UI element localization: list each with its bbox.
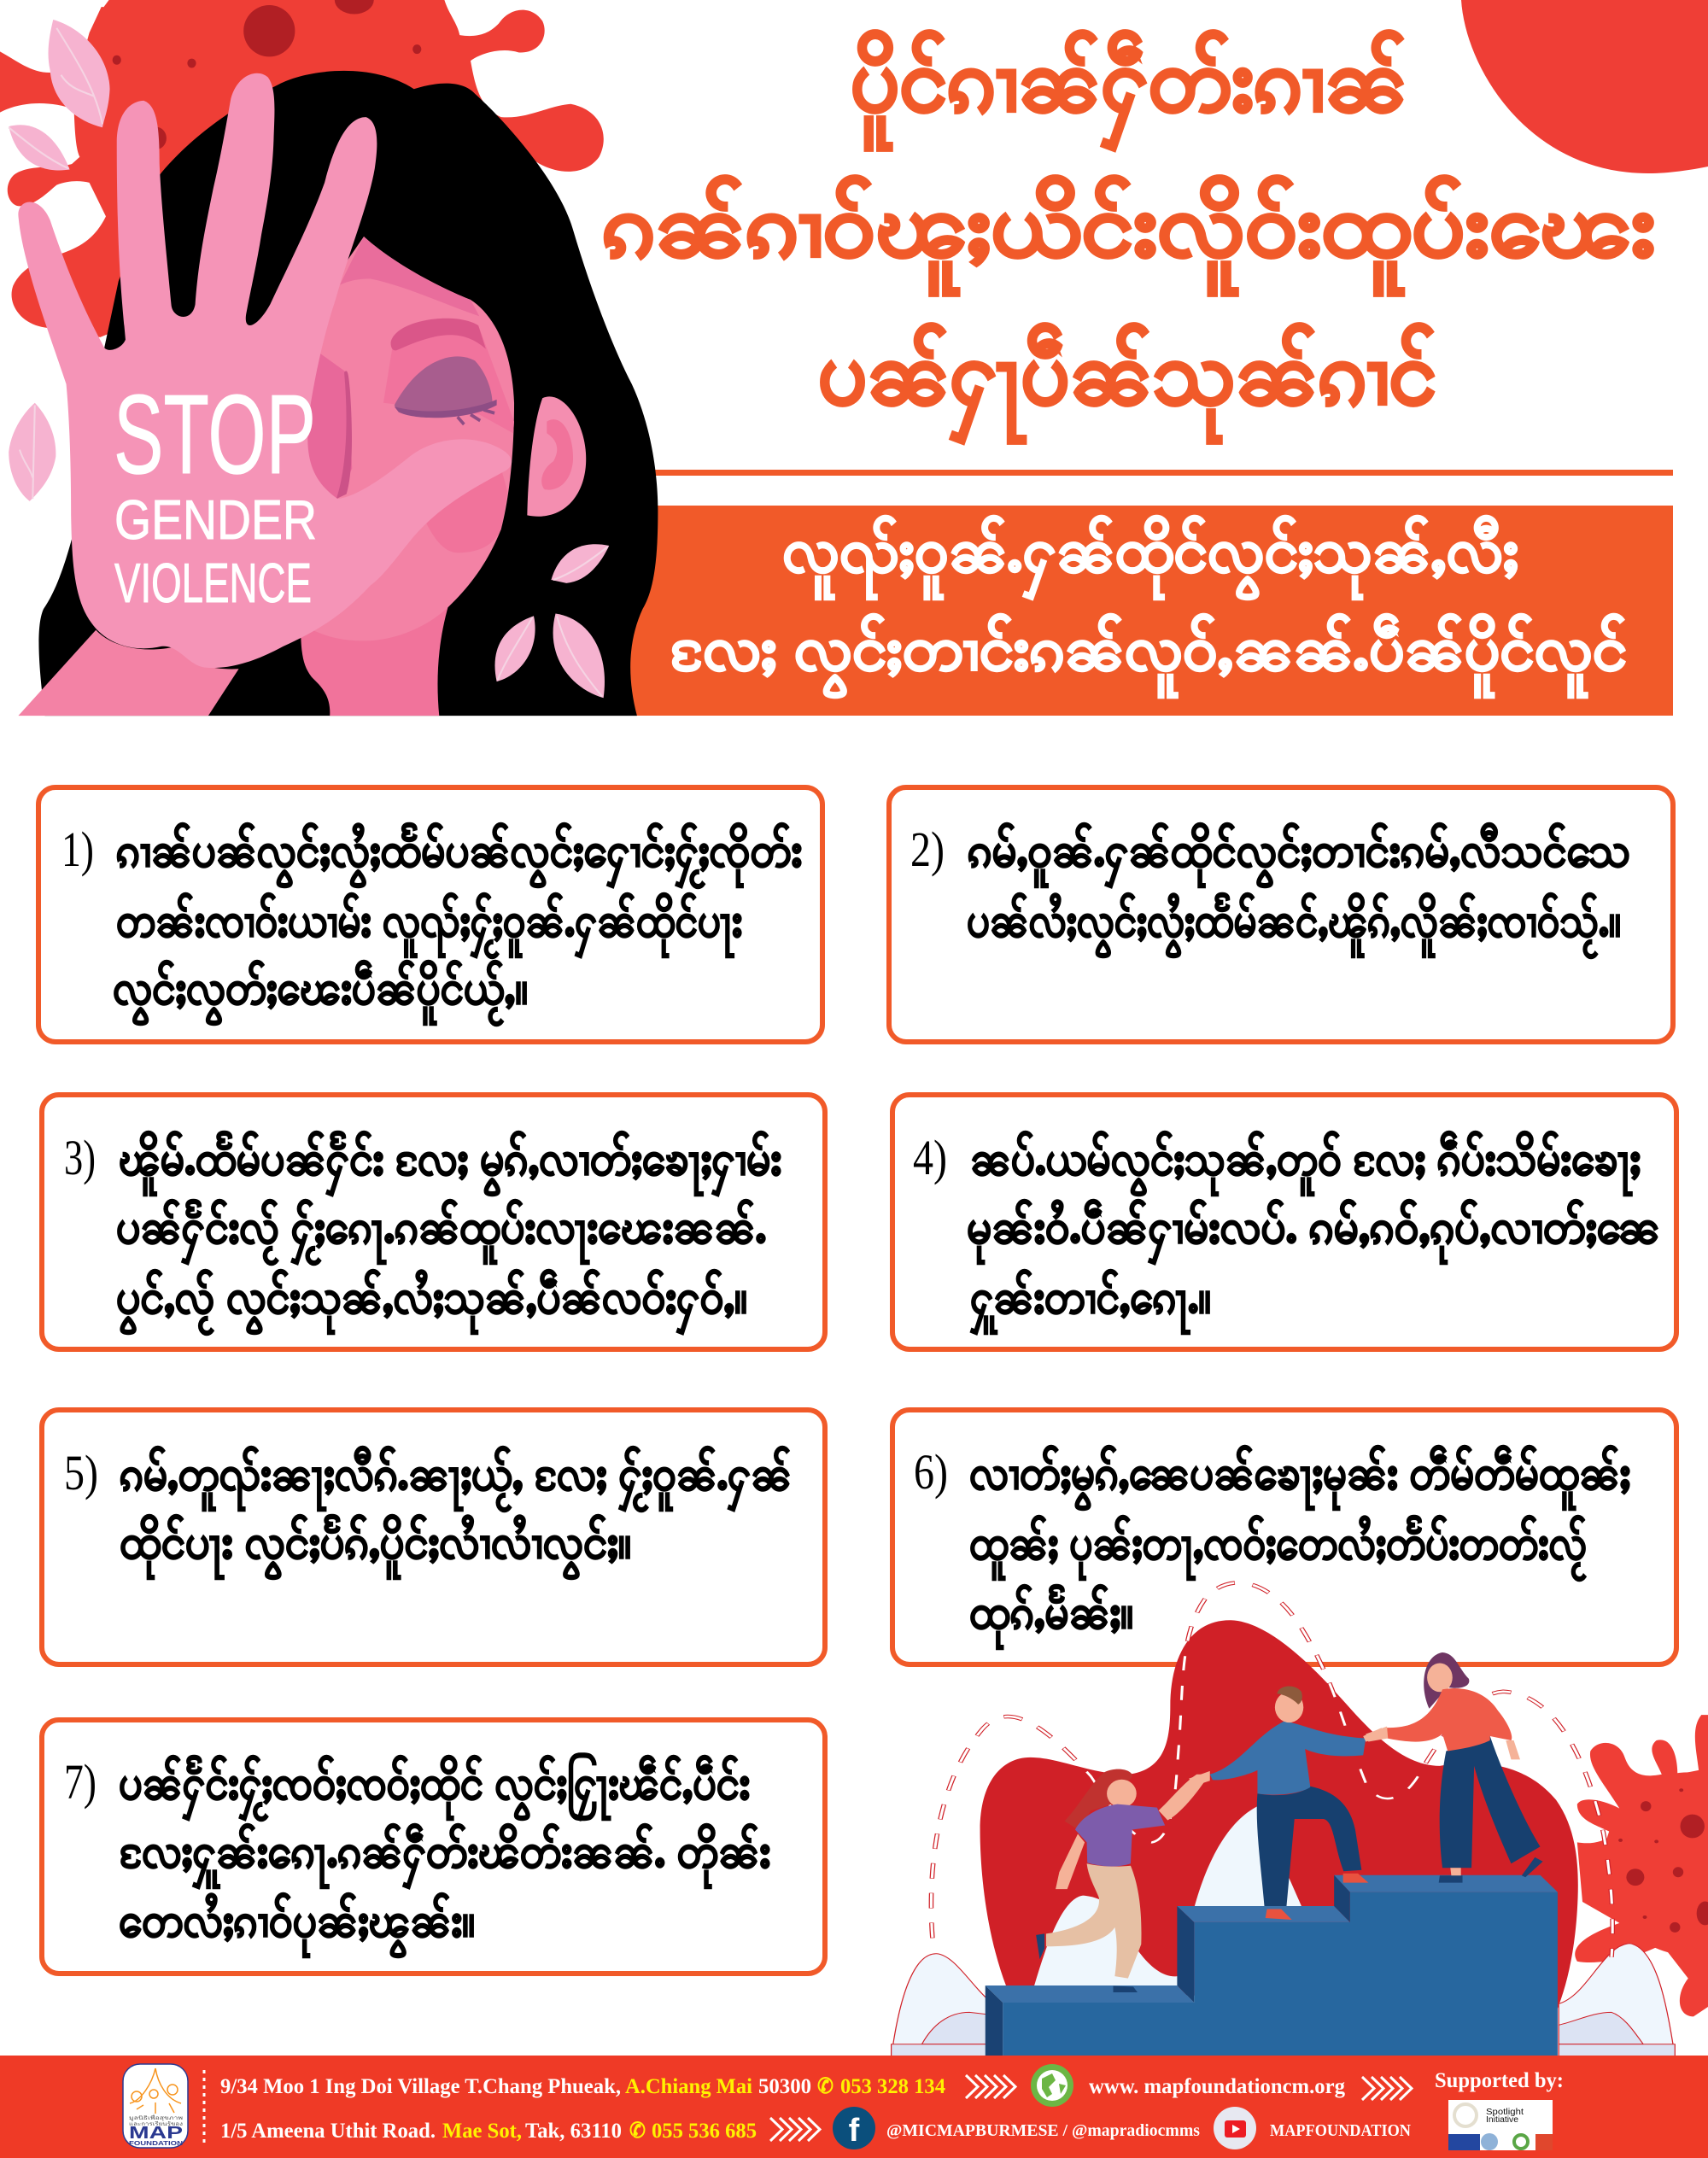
icon: chevrons <box>770 2075 1412 2141</box>
logo: MAP Foundation: MAP <box>129 2124 183 2143</box>
card 6: 6) <box>914 1444 948 1500</box>
hero illustration: woman raising hand <box>0 0 658 716</box>
address line 1: A.Chiang Mai <box>625 2075 752 2098</box>
card 1: ၵၢၼ်ပၼ်လွင်ႈလွႆႈထႅမ်ပၼ်လွင်ႈႁေၢင်ႈႁႂ်ႈၸိုတ်း <box>116 822 802 888</box>
subtitle banner: လူၺ်ႈဝူၼ်ႉႁၼ်ထိုင်လွင်ႈသုၼ်ႇလီႈ <box>782 517 1518 600</box>
card 7: လႄႈႁူၼ်းၵေႃႉၵၼ်ႁဵတ်းၽိတ်းၼၼ်ႉ တိုၼ်း <box>120 1823 770 1889</box>
card 2: ၵမ်ႇဝူၼ်ႉႁၼ်ထိုင်လွင်ႈတၢင်းၵမ်ႇလီသင်သေ <box>968 822 1630 888</box>
card 1: လွင်ႈလွတ်ႈၽေးပဵၼ်ပိူင်ယႂ်ႇ။ <box>113 960 528 1026</box>
title rule <box>649 470 1673 476</box>
address line 2: 1/5 Ameena Uthit Road. <box>220 2120 436 2143</box>
address line 2 <box>220 2120 757 2143</box>
decorative red circle top right <box>1461 0 1708 173</box>
stairs <box>986 1875 1558 2057</box>
logo: MAP Foundation <box>123 2064 188 2148</box>
icon: globe <box>1031 2064 1073 2107</box>
card 7: ပၼ်ႁႅင်းႁႂ်ႈၸဝ်ႈၸဝ်ႈထိုင် လွင်ႈႁြႃးၽဵင်ႇပဵင်း <box>119 1752 750 1821</box>
person: man in blue <box>1189 1686 1382 1920</box>
facebook handles: @MICMAPBURMESE / @mapradiocmms <box>886 2121 1200 2140</box>
address line 1: 053 328 134 <box>840 2075 945 2098</box>
title <box>602 30 1655 444</box>
hair <box>38 71 658 716</box>
hand text: stop gender violence <box>114 371 317 614</box>
subtitle banner: လႄႈ လွင်ႈတၢင်းၵၼ်လူဝ်ႇၼၼ်ႉပဵၼ်ပိူင်လူင် <box>670 614 1627 698</box>
card 1: တၼ်းၸၢဝ်းယၢမ်း လူၺ်ႈႁႂ်ႈဝူၼ်ႉႁၼ်ထိုင်ပႃး <box>116 892 742 958</box>
card 5: 5) <box>64 1445 98 1500</box>
card 4: ႁူၼ်းတၢင်ႇၵေႃႉ။ <box>970 1269 1211 1335</box>
card 3: 3) <box>64 1130 96 1185</box>
card 7: တေလႆႈၵၢဝ်ပုၼ်ႈၽွၼ်း။ <box>119 1892 475 1957</box>
dotted divider <box>203 2070 205 2147</box>
logo: MAP Foundation: FOUNDATION <box>129 2139 183 2147</box>
title: ၵၼ်ၵၢဝ်ၽူႈယိင်းလိူဝ်းထူပ်းၽေး <box>602 175 1655 296</box>
website: www. mapfoundationcm.org <box>1089 2075 1345 2098</box>
card 5 <box>42 1410 825 1664</box>
face and neck <box>301 237 514 716</box>
illustration: people helping each other up stairs <box>892 1582 1708 2057</box>
raised hand <box>18 73 512 668</box>
icon: facebook <box>833 2107 875 2149</box>
hand text: stop gender violence: VIOLENCE <box>114 552 312 614</box>
card 4: မုၼ်းဝႆႉပဵၼ်ႁၢမ်းလပ်ႉ ၵမ်ႇၵဝ်ႇၵုပ်ႇလၢတ်ႈၼေ <box>967 1199 1660 1265</box>
title: ပိူင်ၵၢၼ်ႁဵတ်းၵၢၼ် <box>851 30 1407 151</box>
light arches <box>1034 1806 1302 1987</box>
supported by: Supported by: <box>1435 2069 1564 2092</box>
card 6: ထူၼ်ႈ ပုၼ်ႈတႃႇၸဝ်ႈတေလႆႈတႅပ်းတတ်းလႂ် <box>969 1515 1587 1581</box>
logo: MAP Foundation: และการเรียนรู้ของ <box>129 2120 183 2127</box>
icon: facebook: f <box>849 2113 860 2149</box>
address line 1 <box>220 2075 945 2098</box>
forearm <box>18 630 239 716</box>
footer <box>0 2056 1708 2158</box>
card 6 <box>892 1410 1676 1664</box>
logo: MAP Foundation: มูลนิธิเพื่อสุขภาพ <box>129 2114 183 2121</box>
card 6: လၢတ်ႈမွၵ်ႇၼေပၼ်ၶေႃႈမုၼ်း တဵမ်တဵမ်ထူၼ်ႈ <box>969 1445 1630 1510</box>
card 3 <box>42 1095 825 1349</box>
card 7 <box>42 1720 825 1974</box>
card 5: ထိုင်ပႃး လွင်ႈပႅၵ်ႇပိူင်ႈလၢႆလၢႆလွင်ႈ။ <box>120 1514 631 1579</box>
mounds <box>892 1944 1675 2057</box>
leaves <box>9 20 609 698</box>
card 4 <box>892 1095 1676 1349</box>
address line 2: 055 536 685 <box>652 2120 757 2143</box>
virus right <box>1575 1715 1708 2016</box>
card 5: ၵမ်ႇတူၺ်းၼႃႈလီၵ်ႉၼႃႈယႂ်ႇ လႄႈ ႁႂ်ႈဝူၼ်ႉႁၼ် <box>120 1446 792 1512</box>
address line 2: Tak, 63110 <box>525 2120 622 2143</box>
card 3: ပွင်ႇလႂ် လွင်ႈသုၼ်ႇလႆႈသုၼ်ႇပဵၼ်လဝ်းႁဝ်ႇ။ <box>116 1269 747 1335</box>
person: woman in purple <box>1036 1769 1210 1992</box>
hand text: stop gender violence: STOP <box>114 371 316 497</box>
address line 1: 50300 <box>758 2075 811 2098</box>
title: ပၼ်ႁႃပဵၼ်သုၼ်ၵၢင် <box>818 323 1436 444</box>
card 6: ထုၵ်ႇမႅၼ်ႈ။ <box>969 1584 1133 1649</box>
virus behind the woman <box>0 0 604 337</box>
card 4: 4) <box>913 1130 947 1185</box>
logo: spotlight initiative: Spotlight <box>1486 2108 1524 2117</box>
red blob background <box>980 1620 1578 2012</box>
icon: youtube <box>1214 2107 1256 2149</box>
address line 2: ✆ <box>629 2120 646 2143</box>
card 2: 2) <box>910 822 945 877</box>
card 1 <box>38 787 822 1042</box>
ear <box>527 396 586 517</box>
address line 1: ✆ <box>817 2075 834 2098</box>
subtitle banner <box>598 506 1673 716</box>
card 7: 7) <box>64 1754 97 1810</box>
card 2 <box>889 787 1673 1042</box>
youtube handle: MAPFOUNDATION <box>1270 2121 1411 2140</box>
card 3: ၽိူမ်ႉထႅမ်ပၼ်ႁႅင်း လႄႈ မွၵ်ႇလၢတ်ႈၶေႃႈႁၢမ်း <box>119 1131 781 1196</box>
hand text: stop gender violence: GENDER <box>114 488 317 551</box>
logo: spotlight initiative: Initiative <box>1486 2115 1518 2125</box>
card 1: 1) <box>61 822 94 877</box>
address line 2: Mae Sot, <box>442 2120 522 2143</box>
card 3: ပၼ်ႁႅင်းလႂ် ႁႂ်ႈၵေႃႉၵၼ်ထူပ်းလႃးၽေးၼၼ်ႉ <box>116 1199 766 1265</box>
person: woman in orange <box>1366 1652 1543 1883</box>
logo: spotlight initiative <box>1448 2100 1553 2150</box>
address line 1: 9/34 Moo 1 Ing Doi Village T.Chang Phueak, <box>220 2075 621 2098</box>
dashed paths <box>931 1582 1612 1957</box>
card 4: ၼပ်ႉယမ်လွင်ႈသုၼ်ႇတူဝ် လႄႈ ၵဵပ်းသိမ်းၶေႃႈ <box>970 1131 1641 1196</box>
